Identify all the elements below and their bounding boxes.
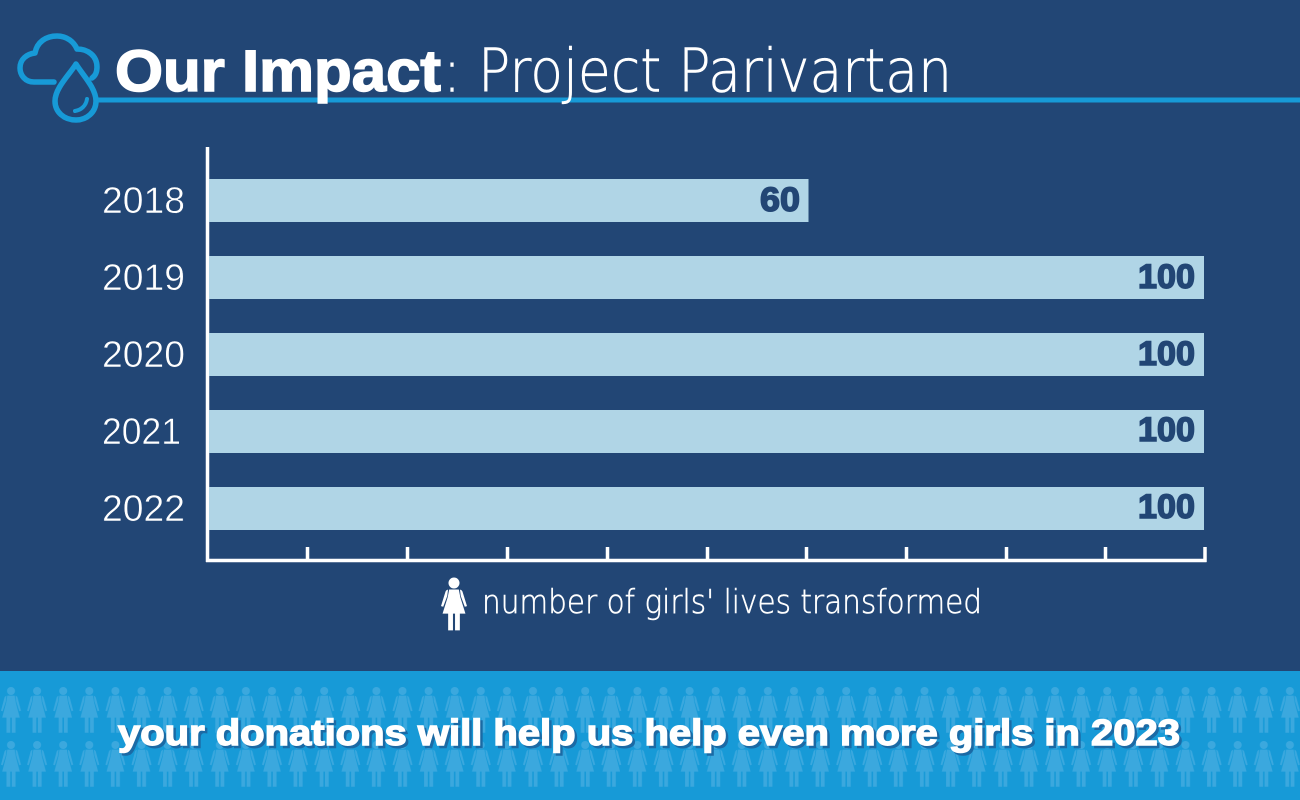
- row: 2021: 2021: [102, 411, 181, 452]
- row: 2020: 100: [1138, 335, 1195, 373]
- icon: cloud and water drop: [20, 36, 97, 120]
- row: 2021: 100: [1138, 411, 1195, 449]
- row: 2019: 100: [1138, 258, 1195, 296]
- row: 2020: 2020: [102, 334, 185, 375]
- row: 2019: [102, 256, 1204, 299]
- donation banner: [0, 671, 1300, 800]
- banner background: [0, 671, 1300, 800]
- row: 2020: [102, 333, 1204, 376]
- crowd pattern: [0, 687, 1300, 787]
- row: 2018: [102, 179, 808, 222]
- title light part: : Project Parivartan: [443, 36, 952, 106]
- row: 2022: [102, 487, 1204, 530]
- row: 2021: [102, 410, 1204, 453]
- banner text: your donations will help us help even more girls in 2023: [118, 712, 1180, 753]
- row: 2018: 60: [760, 181, 800, 219]
- row: 2019: 2019: [102, 257, 185, 298]
- row: 2022: 2022: [102, 488, 185, 529]
- title bold part: Our Impact: [115, 39, 441, 104]
- title underline: [96, 98, 1300, 102]
- bar chart: [102, 147, 1206, 562]
- row: 2022: 100: [1138, 488, 1195, 526]
- title: [115, 36, 952, 106]
- icon: girl: [441, 578, 467, 630]
- chart axes: [206, 147, 1206, 562]
- row: 2018: 2018: [102, 180, 185, 221]
- legend: [441, 578, 982, 630]
- legend text: number of girls' lives transformed: [482, 582, 982, 621]
- banner text shadow: your donations will help us help even more girls in 2023: [120, 714, 1182, 756]
